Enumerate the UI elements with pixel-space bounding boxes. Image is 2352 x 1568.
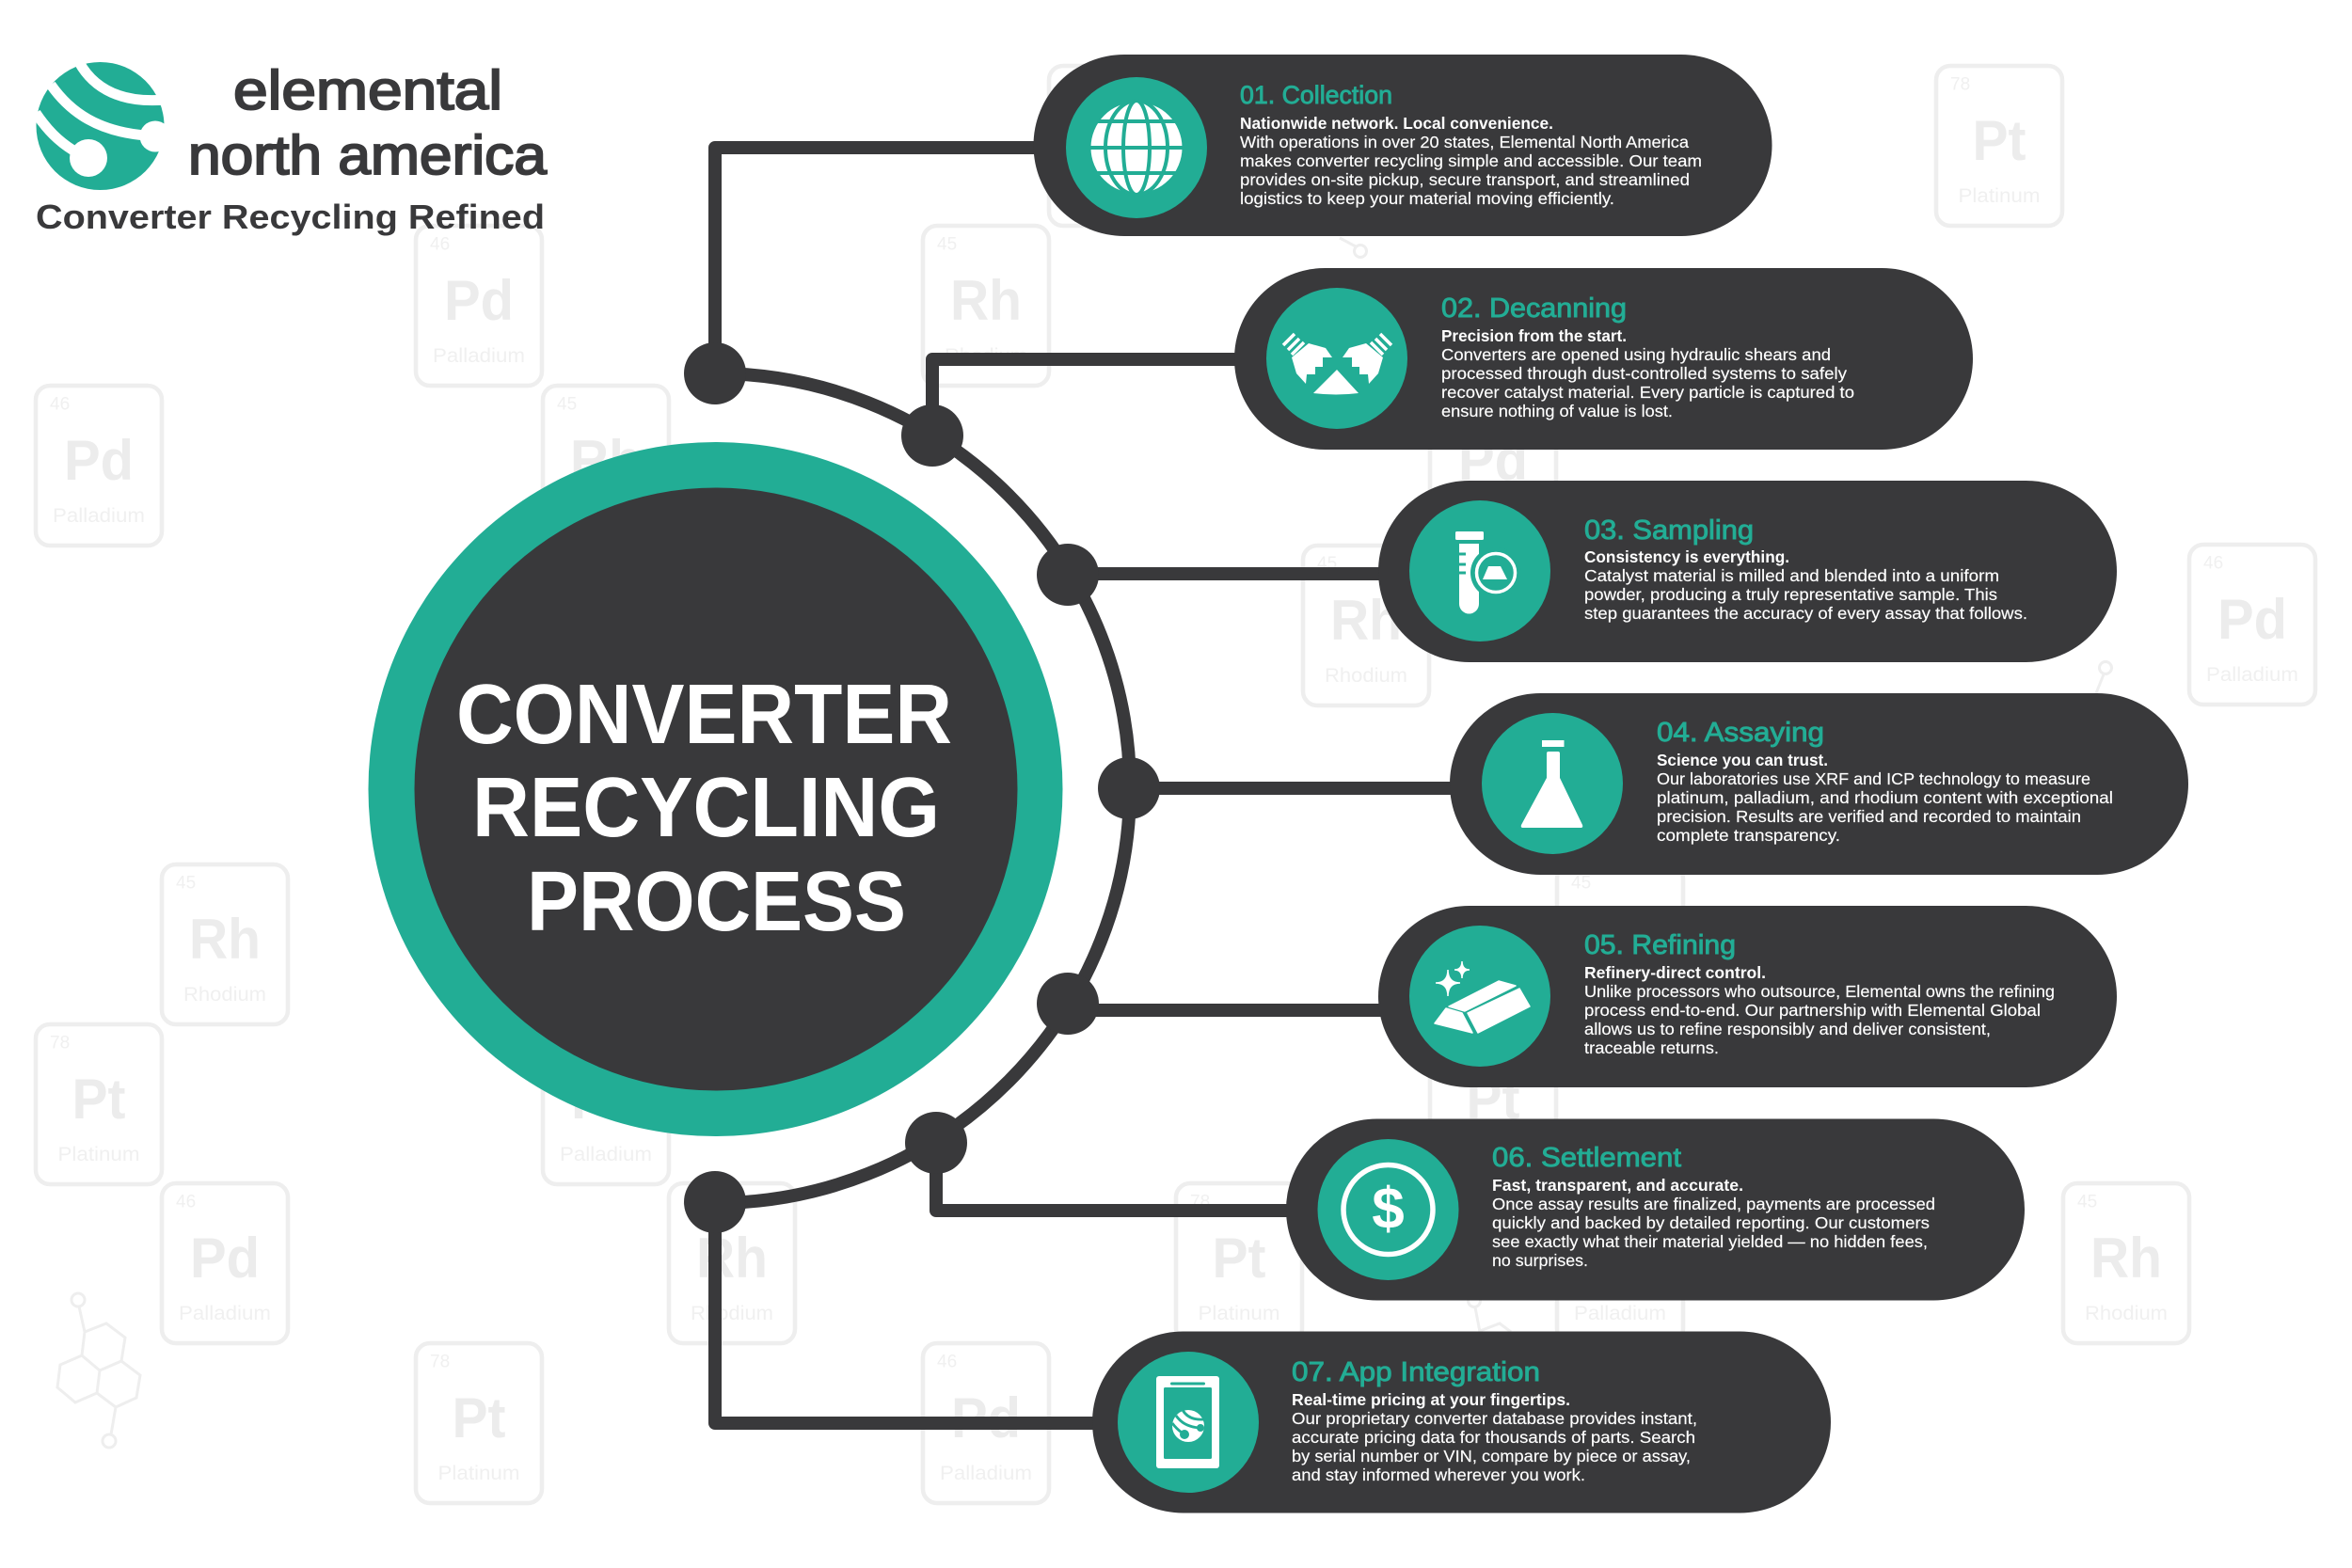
background pattern: periodic table tiles and molecules: Rhodium — [2085, 1303, 2168, 1324]
logo: globe mark — [36, 62, 171, 190]
panel: 03 Sampling: powder, producing a truly representative sample. This — [1584, 585, 1997, 604]
background pattern: periodic table tiles and molecules: Pd — [951, 1386, 1021, 1449]
central circle with process title — [369, 442, 1063, 1136]
background pattern: periodic table tiles and molecules: 78 — [50, 1033, 70, 1053]
panel: 04 Assaying: precision. Results are verified and recorded to maintain — [1657, 807, 2081, 826]
panel: 05 Refining: Unlike processors who outsource, Elemental owns the refining — [1584, 982, 2055, 1001]
icon: dollar coin — [1317, 1139, 1458, 1280]
panel: 02 Decanning: processed through dust-controlled systems to safely — [1441, 364, 1847, 383]
background pattern: periodic table tiles and molecules: Pd — [2217, 588, 2287, 651]
background pattern: periodic table tiles and molecules: Pt — [1212, 1227, 1266, 1290]
background pattern: periodic table tiles and molecules: Platinum — [58, 1144, 139, 1165]
panel: 03 Sampling: Consistency is everything. — [1584, 547, 1789, 566]
icon: dollar coin: $ — [1372, 1177, 1405, 1242]
panel: 07 App Integration: by serial number or VIN, compare by piece or assay, — [1292, 1447, 1691, 1465]
panel: 03 Sampling: Catalyst material is milled and blended into a uniform — [1584, 566, 1999, 585]
panel: 07 App Integration: 07. App Integration — [1292, 1357, 1540, 1387]
panel: 01 Collection: makes converter recycling simple and accessible. Our team — [1240, 151, 1702, 170]
background pattern: periodic table tiles and molecules: 45 — [1317, 554, 1337, 574]
panel: 01 Collection: 01. Collection — [1240, 81, 1392, 109]
panel: 06 Settlement: quickly and backed by detailed reporting. Our customers — [1492, 1213, 1930, 1232]
panel: 04 Assaying: Our laboratories use XRF and ICP technology to measure — [1657, 769, 2090, 788]
background pattern: periodic table tiles and molecules: Platinum — [1959, 185, 2040, 207]
icon: flask — [1482, 713, 1623, 854]
background pattern: periodic table tiles and molecules: 45 — [937, 235, 957, 254]
background pattern: periodic table tiles and molecules: 78 — [1190, 1193, 1210, 1212]
background pattern: periodic table tiles and molecules: 46 — [937, 1353, 957, 1371]
panel: 04 Assaying: Science you can trust. — [1657, 751, 1828, 769]
panel: 01 Collection: logistics to keep your material moving efficiently. — [1240, 189, 1614, 208]
panel: 05 Refining: 05. Refining — [1584, 930, 1736, 960]
background pattern: periodic table tiles and molecules: 45 — [176, 873, 196, 894]
background pattern: periodic table tiles and molecules: Palladium — [560, 1144, 652, 1165]
panel: 05 Refining: allows us to refine responsibly and deliver consistent, — [1584, 1020, 1991, 1038]
background pattern: periodic table tiles and molecules: Platinum — [438, 1463, 519, 1484]
panel: 05 Refining: traceable returns. — [1584, 1038, 1719, 1057]
background pattern: periodic table tiles and molecules: Platinum — [1199, 1303, 1279, 1324]
background pattern: periodic table tiles and molecules: Pt — [1972, 109, 2026, 172]
icon: test tube with magnifier — [1409, 500, 1550, 641]
icon: opened converter with powder — [1266, 288, 1407, 429]
background pattern: periodic table tiles and molecules: Rhodium — [183, 984, 266, 1006]
panel: 04 Assaying: 04. Assaying — [1657, 718, 1824, 748]
panel: 02 Decanning: recover catalyst material. Every particle is captured to — [1441, 383, 1854, 402]
panel: 05 Refining — [1378, 906, 2117, 1087]
background pattern: periodic table tiles and molecules: Rhodium — [1325, 665, 1407, 687]
panel: 04 Assaying: complete transparency. — [1657, 826, 1840, 845]
background pattern: periodic table tiles and molecules: 46 — [50, 395, 70, 414]
panel: 02 Decanning: Converters are opened using hydraulic shears and — [1441, 345, 1831, 364]
background pattern: periodic table tiles and molecules: Palladium — [53, 505, 145, 527]
panel: 04 Assaying: platinum, palladium, and rhodium content with exceptional — [1657, 788, 2113, 807]
background pattern: periodic table tiles and molecules: Pd — [190, 1227, 260, 1290]
panel: 06 Settlement: see exactly what their material yielded — no hidden fees, — [1492, 1232, 1928, 1251]
background pattern: periodic table tiles and molecules: Rhodium — [945, 345, 1027, 367]
background pattern: periodic table tiles and molecules: 46 — [430, 235, 450, 254]
icon: gold bar with sparkles — [1409, 926, 1550, 1067]
panel: 03 Sampling: 03. Sampling — [1584, 515, 1754, 546]
logo wordmark: north america — [188, 125, 548, 186]
background pattern: periodic table tiles and molecules: Rhodium — [691, 1303, 773, 1324]
icon: phone with logo — [1118, 1352, 1259, 1493]
panel: 02 Decanning: Precision from the start. — [1441, 326, 1627, 345]
background pattern: periodic table tiles and molecules: 45 — [683, 1193, 703, 1212]
central circle with process title: CONVERTER — [456, 668, 952, 762]
tagline: Converter Recycling Refined — [36, 198, 545, 236]
central circle with process title: RECYCLING — [472, 761, 940, 855]
background pattern: periodic table tiles and molecules: Pd — [1458, 429, 1528, 492]
panel: 06 Settlement: no surprises. — [1492, 1251, 1588, 1270]
background pattern: periodic table tiles and molecules: 78 — [430, 1353, 450, 1371]
background pattern: periodic table tiles and molecules: Palladium — [1574, 1303, 1666, 1324]
icon: globe — [1066, 77, 1207, 218]
panel: 07 App Integration: and stay informed wherever you work. — [1292, 1465, 1585, 1484]
background pattern: periodic table tiles and molecules: Rh — [189, 908, 261, 971]
background pattern: periodic table tiles and molecules: Rh — [1330, 589, 1402, 652]
panel: 07 App Integration: accurate pricing data for thousands of parts. Search — [1292, 1428, 1695, 1447]
panel: 01 Collection: Nationwide network. Local convenience. — [1240, 114, 1553, 133]
background pattern: periodic table tiles and molecules: Pt — [72, 1068, 126, 1131]
panel: 06 Settlement: Once assay results are finalized, payments are processed — [1492, 1195, 1935, 1213]
background pattern: periodic table tiles and molecules: Pt — [1466, 1068, 1520, 1131]
background pattern: periodic table tiles and molecules: Palladium — [2206, 664, 2298, 686]
background pattern: periodic table tiles and molecules: 45 — [2077, 1193, 2097, 1212]
panel: 01 Collection — [1033, 55, 1772, 236]
panel: 04 Assaying — [1450, 693, 2188, 875]
panel: 05 Refining: process end-to-end. Our partnership with Elemental Global — [1584, 1001, 2041, 1020]
background pattern: periodic table tiles and molecules: Palladium — [433, 345, 525, 367]
background pattern: periodic table tiles and molecules: 46 — [2203, 553, 2223, 574]
central circle with process title: PROCESS — [527, 855, 906, 949]
background pattern: periodic table tiles and molecules: Rh — [696, 1227, 768, 1290]
logo wordmark — [188, 60, 548, 186]
panel: 01 Collection: With operations in over 20 states, Elemental North America — [1240, 133, 1689, 151]
panel: 02 Decanning: ensure nothing of value is lost. — [1441, 402, 1673, 420]
background pattern: periodic table tiles and molecules: 46 — [176, 1193, 196, 1212]
logo wordmark: elemental — [233, 60, 502, 121]
background pattern: periodic table tiles and molecules: 45 — [1571, 873, 1591, 894]
background pattern: periodic table tiles and molecules: Pd — [64, 429, 134, 492]
panel: 06 Settlement: 06. Settlement — [1492, 1143, 1681, 1173]
background pattern: periodic table tiles and molecules: Pd — [571, 1068, 641, 1131]
background pattern: periodic table tiles and molecules: Pt — [452, 1386, 506, 1449]
background pattern: periodic table tiles and molecules: 78 — [1950, 75, 1970, 94]
panel: 05 Refining: Refinery-direct control. — [1584, 963, 1766, 982]
panel: 07 App Integration: Real-time pricing at your fingertips. — [1292, 1390, 1570, 1409]
background pattern: periodic table tiles and molecules: Palladium — [940, 1463, 1032, 1484]
panel: 01 Collection: provides on-site pickup, secure transport, and streamlined — [1240, 170, 1690, 189]
panel: 03 Sampling: step guarantees the accuracy of every assay that follows. — [1584, 604, 2027, 623]
connector arc and branch lines — [715, 148, 1458, 1423]
background pattern: periodic table tiles and molecules: Palladium — [179, 1303, 271, 1324]
background pattern: periodic table tiles and molecules: Rh — [2090, 1227, 2162, 1290]
panel: 02 Decanning — [1234, 268, 1973, 450]
panel: 02 Decanning: 02. Decanning — [1441, 293, 1627, 324]
panel: 07 App Integration — [1092, 1332, 1831, 1513]
background pattern: periodic table tiles and molecules: 45 — [557, 395, 577, 414]
panel: 06 Settlement: Fast, transparent, and accurate. — [1492, 1176, 1743, 1195]
panel: 07 App Integration: Our proprietary converter database provides instant, — [1292, 1409, 1697, 1428]
connector nodes — [684, 342, 1160, 1233]
panel: 06 Settlement — [1286, 1119, 2025, 1300]
background pattern: periodic table tiles and molecules: Pd — [444, 269, 514, 332]
background pattern: periodic table tiles and molecules: Rh — [950, 269, 1022, 332]
background pattern: periodic table tiles and molecules: Rh — [570, 429, 642, 492]
panel: 03 Sampling — [1378, 481, 2117, 662]
